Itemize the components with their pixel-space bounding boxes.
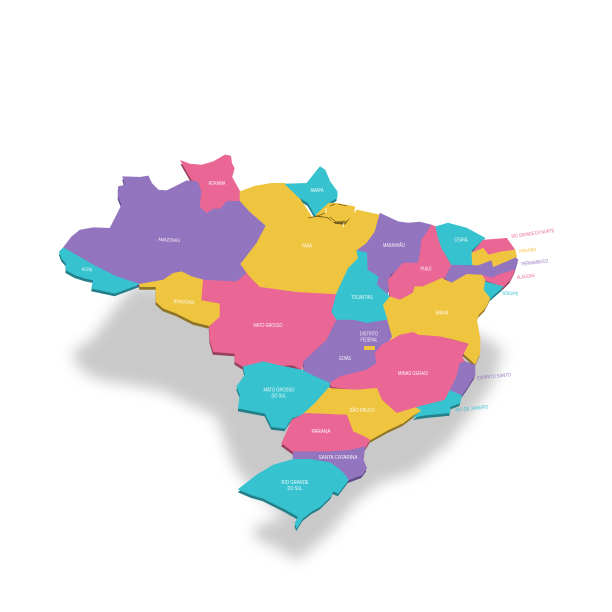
- state: Amapa: [285, 167, 337, 215]
- label: Rio Grande do Norte: RIO GRANDE DO NORTE: [511, 228, 555, 240]
- state: Rio Grande do Sul: RIO GRANDE: [282, 480, 309, 486]
- state: Roraima: RORAIMA: [209, 181, 226, 187]
- state: Goias and Distrito Federal: FEDERAL: [360, 338, 378, 344]
- label: Paraiba: PARAÍBA: [519, 246, 537, 255]
- state: Parana: PARANÁ: [312, 428, 331, 435]
- state: Piaui: PIAUÍ: [420, 266, 432, 272]
- state: Amazonas: [63, 176, 266, 284]
- state: Goias and Distrito Federal: DISTRITO: [360, 332, 378, 338]
- extruded map sides: [59, 158, 518, 531]
- state: Para: PARÁ: [302, 242, 312, 250]
- state: Piaui: [388, 225, 452, 300]
- ground shadow: [72, 285, 503, 561]
- state: Minas Gerais: [330, 332, 468, 413]
- state: Pernambuco: [445, 257, 518, 283]
- state: Paraiba: [472, 248, 517, 267]
- state: Rio Grande do Sul: [238, 459, 348, 528]
- state: Rondonia: RONDÔNIA: [173, 298, 195, 306]
- state: Bahia: BAHIA: [436, 310, 449, 316]
- state: Parana: [282, 413, 370, 452]
- state: Tocantins: TOCANTINS: [351, 295, 373, 301]
- state: Alagoas: [482, 270, 515, 287]
- state: Acre: [59, 248, 139, 293]
- state: Mato Grosso do Sul: [237, 362, 330, 428]
- state: Rio Grande do Norte: [472, 238, 515, 255]
- state: Tocantins: [332, 251, 390, 323]
- state: Acre: ACRE: [82, 267, 93, 273]
- state: Sao Paulo: SÃO PAULO: [350, 407, 375, 414]
- state: Mato Grosso: MATO GROSSO: [254, 323, 283, 329]
- state: Roraima: [181, 155, 240, 213]
- state: Santa Catarina: [293, 447, 367, 480]
- state: Ceara: CEARÁ: [454, 236, 468, 244]
- label: Espirito Santo: ESPÍRITO SANTO: [477, 371, 511, 382]
- state: Rio Grande do Sul: DO SUL: [288, 486, 303, 492]
- label: Sergipe: SERGIPE: [502, 291, 519, 297]
- state: Mato Grosso: [202, 264, 337, 370]
- state: Goias and Distrito Federal: [303, 320, 392, 383]
- label: Rio de Janeiro: RIO DE JANEIRO: [455, 404, 489, 414]
- label: Alagoas: ALAGOAS: [517, 273, 536, 281]
- state: Rio de Janeiro: [413, 390, 462, 417]
- state: Rondonia: [139, 272, 220, 326]
- label: Pernambuco: PERNAMBUCO: [521, 258, 549, 268]
- state: Minas Gerais: MINAS GERAIS: [398, 371, 429, 377]
- state: Goias and Distrito Federal: GOIÁS: [339, 355, 352, 362]
- state: Amazonas: AMAZONAS: [158, 237, 181, 244]
- state: Para: [240, 183, 380, 294]
- state: Bahia: [383, 274, 490, 364]
- state: Sao Paulo: [303, 388, 422, 440]
- state: Espirito Santo: [450, 362, 475, 395]
- state: Sergipe: [483, 281, 503, 298]
- state: Amapa: AMAPÁ: [310, 187, 324, 194]
- state: Maranhao: MARANHÃO: [383, 242, 405, 249]
- state: Santa Catarina: SANTA CATARINA: [318, 455, 358, 461]
- state: Mato Grosso do Sul: DO SUL: [272, 394, 287, 400]
- state: Maranhao: [357, 213, 432, 295]
- state: Ceara: [436, 223, 485, 265]
- state: Mato Grosso do Sul: MATO GROSSO: [264, 388, 295, 394]
